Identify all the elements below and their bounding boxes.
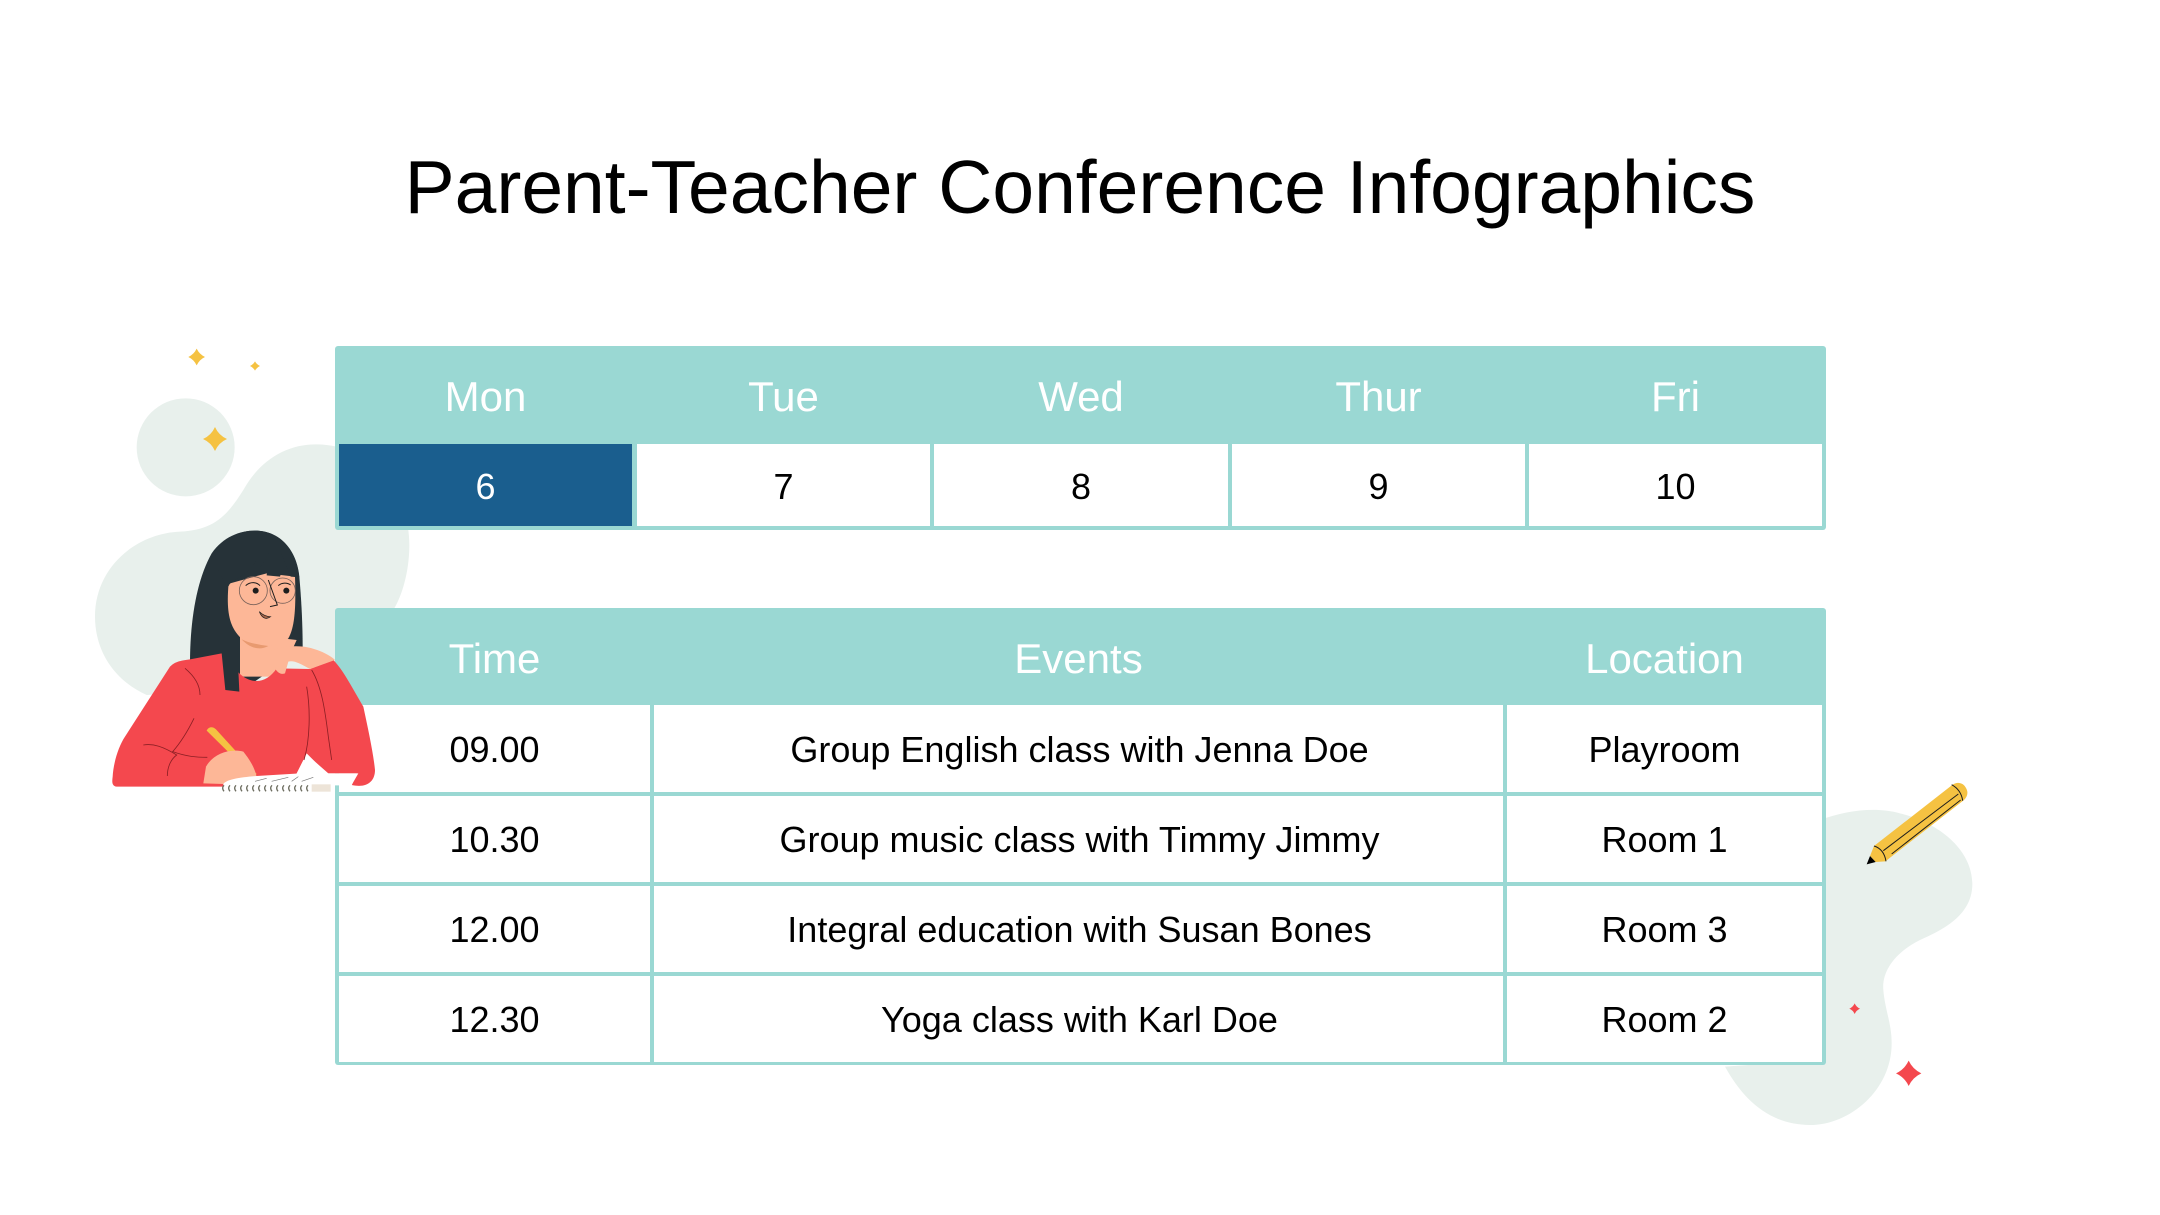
row 1 time xyxy=(339,705,650,792)
row 4 event: Yoga class with Karl Doe xyxy=(881,999,1278,1040)
calendar table xyxy=(335,346,1826,530)
row 4 location xyxy=(1507,976,1822,1062)
column header: Location: Location xyxy=(1585,634,1744,682)
row 3 location: Room 3 xyxy=(1601,909,1728,950)
row 4 location: Room 2 xyxy=(1601,999,1728,1040)
row 2 location: Room 1 xyxy=(1601,819,1728,860)
row 2 time xyxy=(339,796,650,882)
row 2 location xyxy=(1507,796,1822,882)
row 2 time: 10.30 xyxy=(449,819,540,860)
date cell: 10: 10 xyxy=(1655,466,1696,507)
row 1 event: Group English class with Jenna Doe xyxy=(790,728,1369,770)
row 4 time xyxy=(339,976,650,1062)
selected date cell: 6 xyxy=(339,444,632,526)
row 1 location xyxy=(1507,705,1822,792)
icon: yellow pencil xyxy=(1867,783,1967,864)
illustration: woman writing in a notebook xyxy=(112,531,375,792)
row 4 event xyxy=(654,976,1503,1062)
row 1 event xyxy=(654,705,1503,792)
column header: Events: Events xyxy=(1014,634,1143,682)
schedule table xyxy=(335,608,1826,1065)
date cell: 7 xyxy=(637,444,930,526)
weekday header: Thur: Thur xyxy=(1335,373,1422,420)
weekday header: Fri: Fri xyxy=(1651,373,1700,420)
row 3 event xyxy=(654,886,1503,972)
row 3 time xyxy=(339,886,650,972)
date cell: 10 xyxy=(1529,444,1822,526)
date cell: 8: 8 xyxy=(1071,466,1091,507)
right decoration: blob and red sparkles xyxy=(1725,810,1972,1125)
row 3 time: 12.00 xyxy=(449,909,540,950)
row 4 time: 12.30 xyxy=(449,999,540,1040)
weekday header: Mon: Mon xyxy=(445,373,526,420)
date cell: 7: 7 xyxy=(773,466,794,507)
column header: Time: Time xyxy=(449,634,540,682)
weekday header: Tue: Tue xyxy=(748,373,819,420)
row 1 time: 09.00 xyxy=(449,728,540,770)
date cell: 9 xyxy=(1232,444,1525,526)
row 2 event: Group music class with Timmy Jimmy xyxy=(779,819,1380,860)
weekday header: Wed: Wed xyxy=(1038,373,1124,420)
selected date cell: 6: 6 xyxy=(475,466,496,507)
date cell: 9: 9 xyxy=(1368,466,1389,507)
left decoration: blob, circle and yellow sparkles xyxy=(95,349,409,695)
row 3 location xyxy=(1507,886,1822,972)
row 3 event: Integral education with Susan Bones xyxy=(787,909,1372,950)
title: Parent-Teacher Conference Infographics xyxy=(405,145,1755,229)
row 2 event xyxy=(654,796,1503,882)
row 1 location: Playroom xyxy=(1588,728,1741,770)
date cell: 8 xyxy=(934,444,1228,526)
